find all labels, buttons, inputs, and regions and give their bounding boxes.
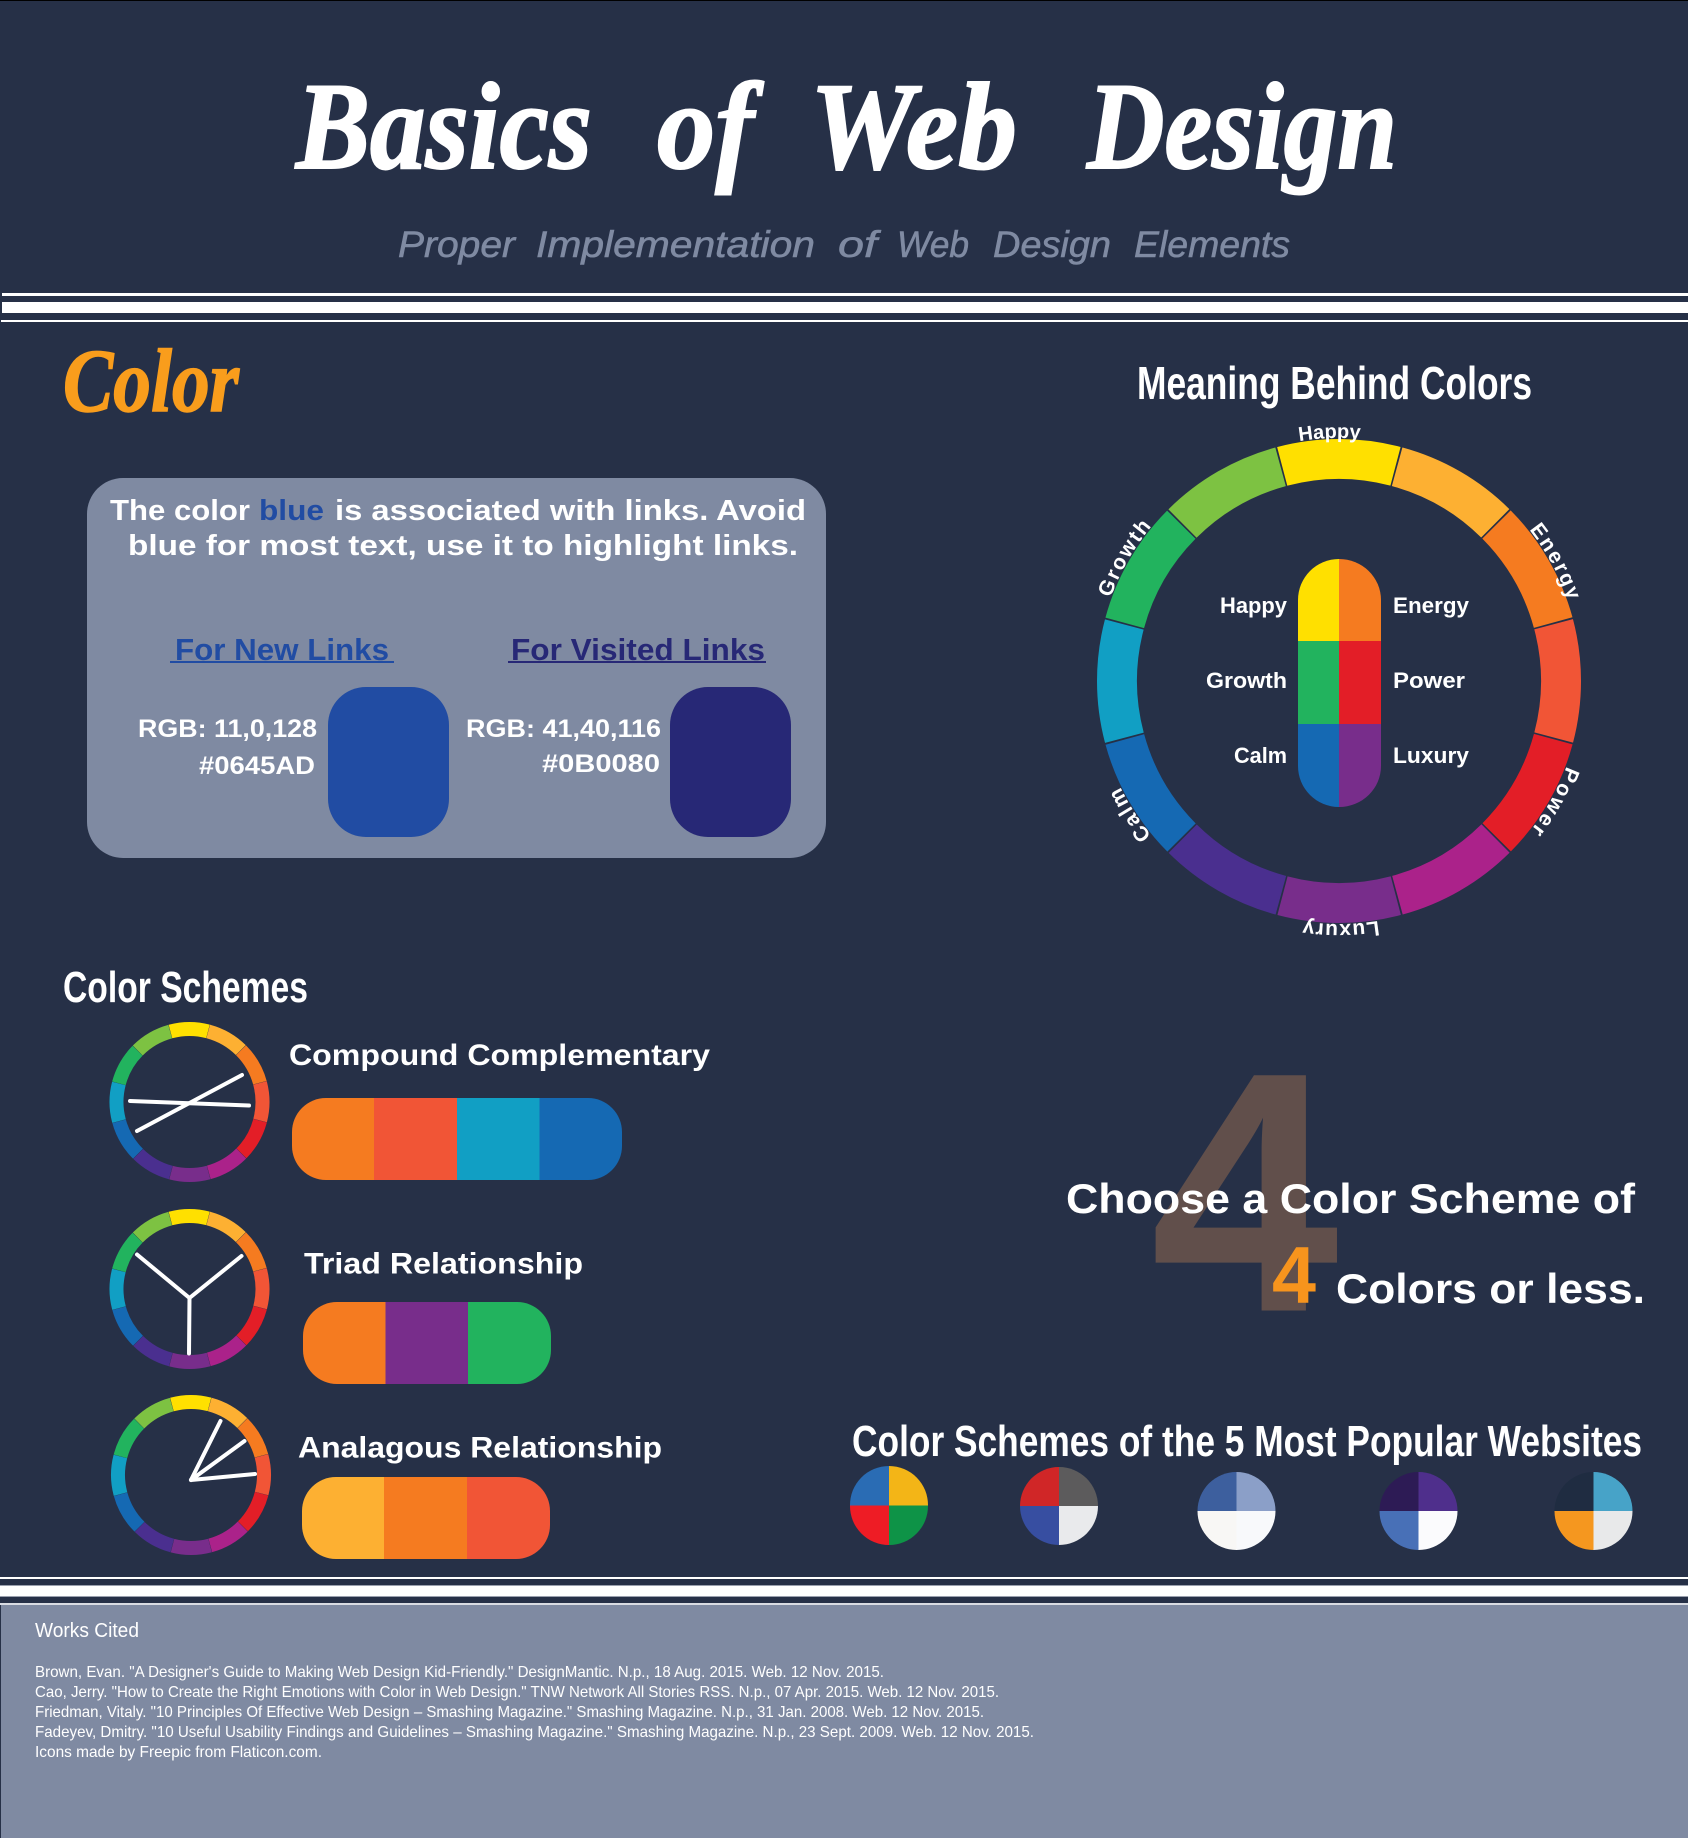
website scheme 4 [1380,1472,1458,1550]
website scheme 3 [1198,1472,1276,1550]
center labels: Energy [1393,593,1470,618]
swatch pill [302,1477,550,1559]
panel: link colors [87,478,826,858]
website scheme 5 [1554,1472,1632,1550]
title: Design [1086,58,1397,195]
heading: meaning behind colors: Meaning Behind Colors [1137,357,1532,409]
curved wheel labels: Power [1533,767,1580,836]
citations [35,1664,1034,1761]
callout: choose 4 colors [1066,1002,1645,1384]
new links column: RGB: 11,0,128 [138,715,317,743]
relationship lines [137,1254,242,1354]
callout: choose 4 colors: Colors or less. [1336,1265,1645,1312]
subtitle: Design [993,224,1111,265]
center labels: Growth [1206,668,1287,693]
title [294,58,1397,195]
website scheme 1 [850,1466,928,1545]
heading: color: Color [63,332,240,431]
color wheel [1097,426,1581,936]
swatch pill [292,1098,622,1180]
title: of [657,58,764,195]
subtitle: Elements [1134,224,1290,265]
new links column [138,632,449,837]
scheme: analogous [88,1372,662,1578]
swatch pill [303,1302,551,1384]
title: Basics [294,58,592,195]
visited links column: RGB: 41,40,116 [466,715,661,743]
citations: Icons made by Freepic from Flaticon.com. [35,1744,322,1761]
center labels: Luxury [1393,743,1470,768]
orange 4: 4 [1272,1231,1316,1321]
center pill [1298,559,1381,807]
new links column: For New Links [175,632,389,667]
visited links column: #0B0080 [542,750,660,778]
citations: Friedman, Vitaly. "10 Principles Of Effective Web Design – Smashing Magazine." Smashing Magazine. N.p., 31 Jan. 2008. Web. 12 Nov. 2015. [35,1704,984,1721]
visited links column [466,632,791,837]
citations: Cao, Jerry. "How to Create the Right Emotions with Color in Web Design." TNW Network All Stories RSS. N.p., 07 Apr. 2015. Web. 12 Nov. 2015. [35,1684,999,1701]
subtitle: Web [897,224,969,265]
panel text [110,495,806,562]
works cited heading: Works Cited [35,1620,139,1642]
panel text: The color [110,495,250,527]
visited links column: For Visited Links [511,632,765,667]
title: Web [810,58,1017,195]
panel text: blue [259,495,324,527]
small wheel [88,1372,294,1578]
subtitle: of [838,224,882,265]
website scheme 2 [1020,1467,1098,1545]
panel text: blue for most text, use it to highlight links. [128,530,798,562]
scheme: triad [86,1186,583,1392]
subtitle [398,224,1290,265]
citations: Fadeyev, Dmitry. "10 Useful Usability Findings and Guidelines – Smashing Magazine." Smashing Magazine. N.p., 23 Sept. 2009. Web. 12 Nov. 2015. [35,1724,1034,1741]
center labels: Calm [1234,743,1287,768]
label: Triad Relationship [304,1248,583,1280]
relationship lines [130,1075,249,1131]
small wheel [86,999,293,1205]
callout text: Choose a Color Scheme of [1066,1175,1636,1222]
heading: color schemes: Color Schemes [63,963,308,1012]
subtitle: Proper [398,224,517,265]
citations: Brown, Evan. "A Designer's Guide to Making Web Design Kid-Friendly." DesignMantic. N.p., 18 Aug. 2015. Web. 12 Nov. 2015. [35,1664,884,1681]
center labels [1206,593,1470,768]
wheel segments [1025,367,1653,995]
label: Analagous Relationship [298,1432,662,1464]
curved wheel labels: Energy [1530,522,1579,596]
relationship lines [191,1421,255,1480]
curved wheel labels: Luxury [1302,918,1379,936]
scheme: compound complementary [86,999,710,1205]
center labels: Power [1393,668,1465,693]
center labels: Happy [1220,593,1288,618]
curved wheel labels: Growth [1099,522,1151,596]
panel: works cited [1,1605,1688,1838]
big background 4: 4 [1150,1002,1341,1384]
curved wheel labels [1099,426,1580,936]
label: Compound Complementary [289,1039,710,1072]
curved wheel labels: Calm [1112,788,1148,842]
curved wheel labels: Happy [1298,426,1361,442]
new links column: #0645AD [199,752,315,780]
panel text: is associated with links. Avoid [335,495,806,527]
subtitle: Implementation [536,224,815,265]
small wheel [86,1186,293,1392]
